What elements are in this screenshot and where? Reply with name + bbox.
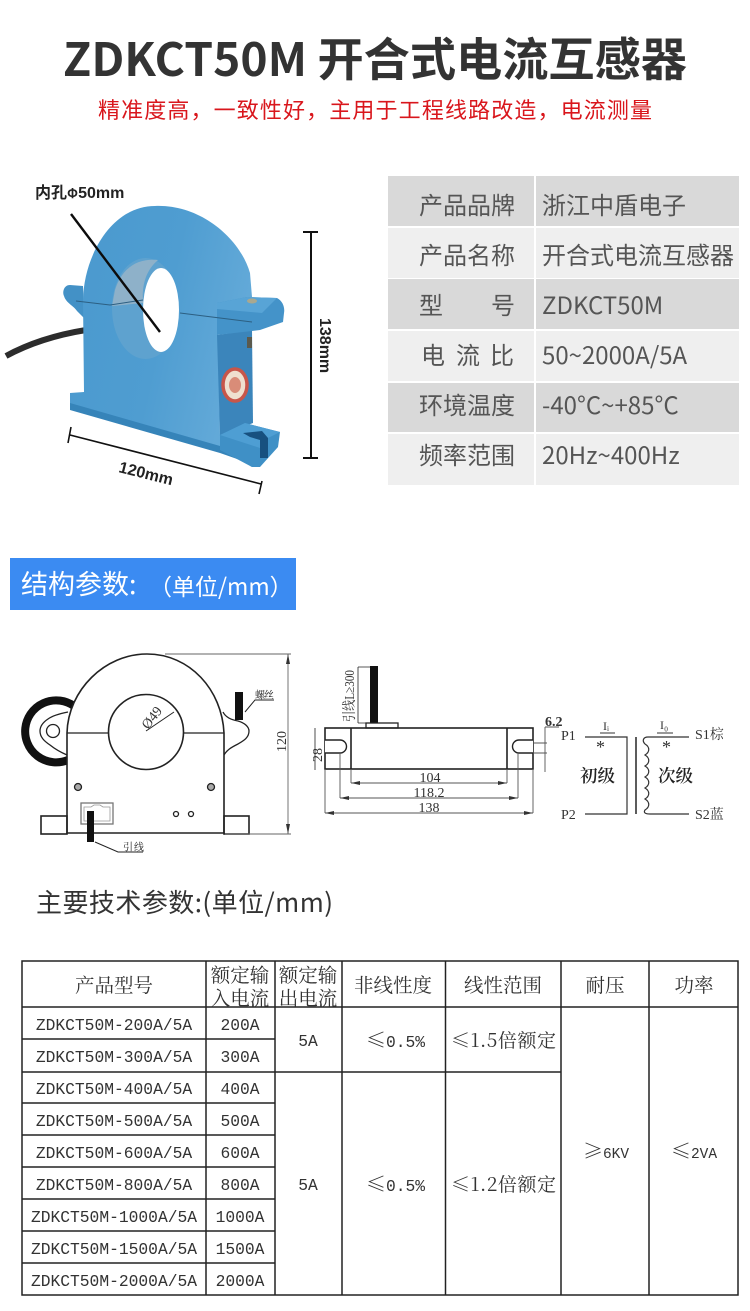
header row: 额定输 <box>279 960 337 988</box>
left ear <box>40 712 68 755</box>
header row: 非线性度 <box>354 970 432 998</box>
bore <box>108 694 184 770</box>
terminal S1: S1棕 <box>695 726 725 743</box>
row: brand: 浙江中盾电子 <box>542 186 686 221</box>
input current column: 2000A <box>216 1272 265 1291</box>
model rows: ZDKCT50M-800A/5A <box>36 1176 192 1195</box>
input current column: 1000A <box>216 1208 265 1227</box>
side view drawing: 138 <box>418 801 440 816</box>
row: brand <box>419 186 686 221</box>
nonlinearity cells: ≤0.5% <box>366 1168 425 1197</box>
row: frequency: 20Hz~400Hz <box>542 436 680 471</box>
screw label: 螺丝 <box>255 686 274 702</box>
input current column: 1500A <box>216 1240 265 1259</box>
spec table <box>388 176 739 485</box>
left ear <box>63 285 84 318</box>
nonlinearity cells <box>366 1024 425 1197</box>
right ear <box>217 297 284 335</box>
header row: 出电流 <box>279 983 337 1011</box>
height dimension: 120 <box>275 731 290 752</box>
subtitle: 精准度高，一致性好，主用于工程线路改造，电流测量 <box>98 93 652 125</box>
model rows: ZDKCT50M-1500A/5A <box>31 1240 197 1259</box>
row: model <box>419 286 663 321</box>
section heading: technical parameters: 主要技术参数:(单位/mm) <box>36 883 333 920</box>
current Io: I₀ <box>660 718 668 732</box>
row: ratio: 比 <box>490 336 514 371</box>
cable loop <box>25 700 74 762</box>
voltage and power cells <box>583 1135 717 1164</box>
nonlinearity cells: ≤0.5% <box>366 1024 425 1053</box>
star right: * <box>662 737 671 757</box>
row: ratio: 电 <box>421 336 445 371</box>
title: ZDKCT50M 开合式电流互感器 <box>63 24 687 90</box>
model rows <box>31 1016 197 1291</box>
lead label: 引线 <box>123 838 144 854</box>
side view drawing: 28 <box>311 748 326 762</box>
dimension 138mm: 138mm <box>316 318 333 373</box>
header row: 额定输 <box>211 960 269 988</box>
split seam <box>76 300 252 322</box>
side view drawing <box>311 666 562 816</box>
front view drawing <box>25 654 291 854</box>
lead <box>370 666 378 723</box>
right ear <box>223 712 249 757</box>
side view drawing: 118.2 <box>414 786 444 801</box>
side view drawing: 6.2 <box>545 715 562 730</box>
row: model: 号 <box>491 286 515 321</box>
row: ratio: 流 <box>456 336 480 371</box>
pointer line <box>71 214 160 332</box>
technical parameters table <box>22 960 738 1295</box>
side view drawing: 104 <box>420 771 440 786</box>
ring and body <box>70 206 252 450</box>
current Ii: Iᵢ <box>603 719 609 733</box>
header row: 功率 <box>674 970 714 998</box>
row: temperature: -40°C~+85°C <box>542 386 679 421</box>
input current column: 500A <box>220 1112 260 1131</box>
row: name: 产品名称 <box>419 236 515 271</box>
connector <box>81 803 113 824</box>
row: frequency: 频率范围 <box>419 436 515 471</box>
section banner: structure parameters: （单位/mm） <box>149 568 293 602</box>
input current column: 600A <box>220 1144 260 1163</box>
lead length label: 引线L≥300 <box>341 670 358 722</box>
model rows: ZDKCT50M-500A/5A <box>36 1112 192 1131</box>
row: temperature <box>419 386 679 421</box>
side face <box>217 330 253 436</box>
input current column: 300A <box>220 1048 260 1067</box>
voltage and power cells: ≥6KV <box>583 1135 629 1164</box>
foot slot <box>243 431 268 458</box>
wiring diagram <box>561 718 725 823</box>
voltage and power cells: ≤2VA <box>671 1135 717 1164</box>
input current column <box>216 1016 265 1291</box>
body <box>325 728 533 769</box>
dimensions <box>351 769 507 783</box>
grid <box>22 961 738 1295</box>
dimension 120mm: 120mm <box>117 459 175 489</box>
merged value cells: 5A <box>298 1176 318 1195</box>
star left: * <box>596 737 605 757</box>
row: ratio <box>421 336 688 371</box>
feet <box>41 816 67 834</box>
screw label <box>245 686 274 712</box>
row: brand: 产品品牌 <box>419 186 515 221</box>
dimension 138mm <box>303 232 333 458</box>
input current column: 400A <box>220 1080 260 1099</box>
bolts <box>74 784 82 790</box>
model rows: ZDKCT50M-400A/5A <box>36 1080 192 1099</box>
merged value cells <box>298 1032 318 1195</box>
row: temperature: 环境温度 <box>419 386 515 421</box>
header row <box>75 960 714 1011</box>
bore label: 内孔Φ50mm <box>35 179 124 203</box>
bore wall <box>112 258 179 359</box>
round sticker <box>223 369 247 401</box>
terminal S2: S2蓝 <box>695 806 724 823</box>
model rows: ZDKCT50M-200A/5A <box>36 1016 192 1035</box>
dimension 120mm <box>68 427 262 494</box>
lower front shading <box>70 403 260 467</box>
product photo <box>6 179 333 494</box>
linear range cells <box>451 1026 556 1197</box>
row: ratio: 50~2000A/5A <box>542 336 688 371</box>
section banner: structure parameters <box>10 558 296 610</box>
cable <box>6 330 86 356</box>
input current column: 200A <box>220 1016 260 1035</box>
model rows: ZDKCT50M-300A/5A <box>36 1048 192 1067</box>
row: name: 开合式电流互感器 <box>542 236 734 271</box>
terminal P1: P1 <box>561 729 576 744</box>
lead label <box>95 838 144 854</box>
input current column: 800A <box>220 1176 260 1195</box>
model rows: ZDKCT50M-1000A/5A <box>31 1208 197 1227</box>
diameter label: Ø49 <box>139 704 166 732</box>
split line <box>67 732 224 734</box>
header row: 产品型号 <box>75 970 153 998</box>
section banner: structure parameters: 结构参数: <box>21 563 137 602</box>
row: model: 型 <box>419 286 443 321</box>
linear range cells: ≤1.2倍额定 <box>451 1170 556 1197</box>
ear screw <box>247 298 257 304</box>
row: name <box>419 236 734 271</box>
header row: 耐压 <box>585 970 625 998</box>
lead length label <box>341 667 370 723</box>
lead <box>87 811 94 842</box>
outline <box>67 654 224 833</box>
header row: 入电流 <box>211 983 269 1011</box>
height dimension <box>165 654 291 834</box>
model rows: ZDKCT50M-2000A/5A <box>31 1272 197 1291</box>
secondary label: 次级 <box>658 763 693 788</box>
model rows: ZDKCT50M-600A/5A <box>36 1144 192 1163</box>
primary label: 初级 <box>580 763 615 788</box>
terminal P2: P2 <box>561 808 576 823</box>
linear range cells: ≤1.5倍额定 <box>451 1026 556 1053</box>
right foot <box>220 423 280 467</box>
screw <box>235 692 243 720</box>
row: model: ZDKCT50M <box>542 286 663 321</box>
header row: 线性范围 <box>464 970 542 998</box>
bore opening <box>143 268 179 352</box>
row: frequency <box>419 436 680 471</box>
side connector <box>247 337 252 348</box>
merged value cells: 5A <box>298 1032 318 1051</box>
